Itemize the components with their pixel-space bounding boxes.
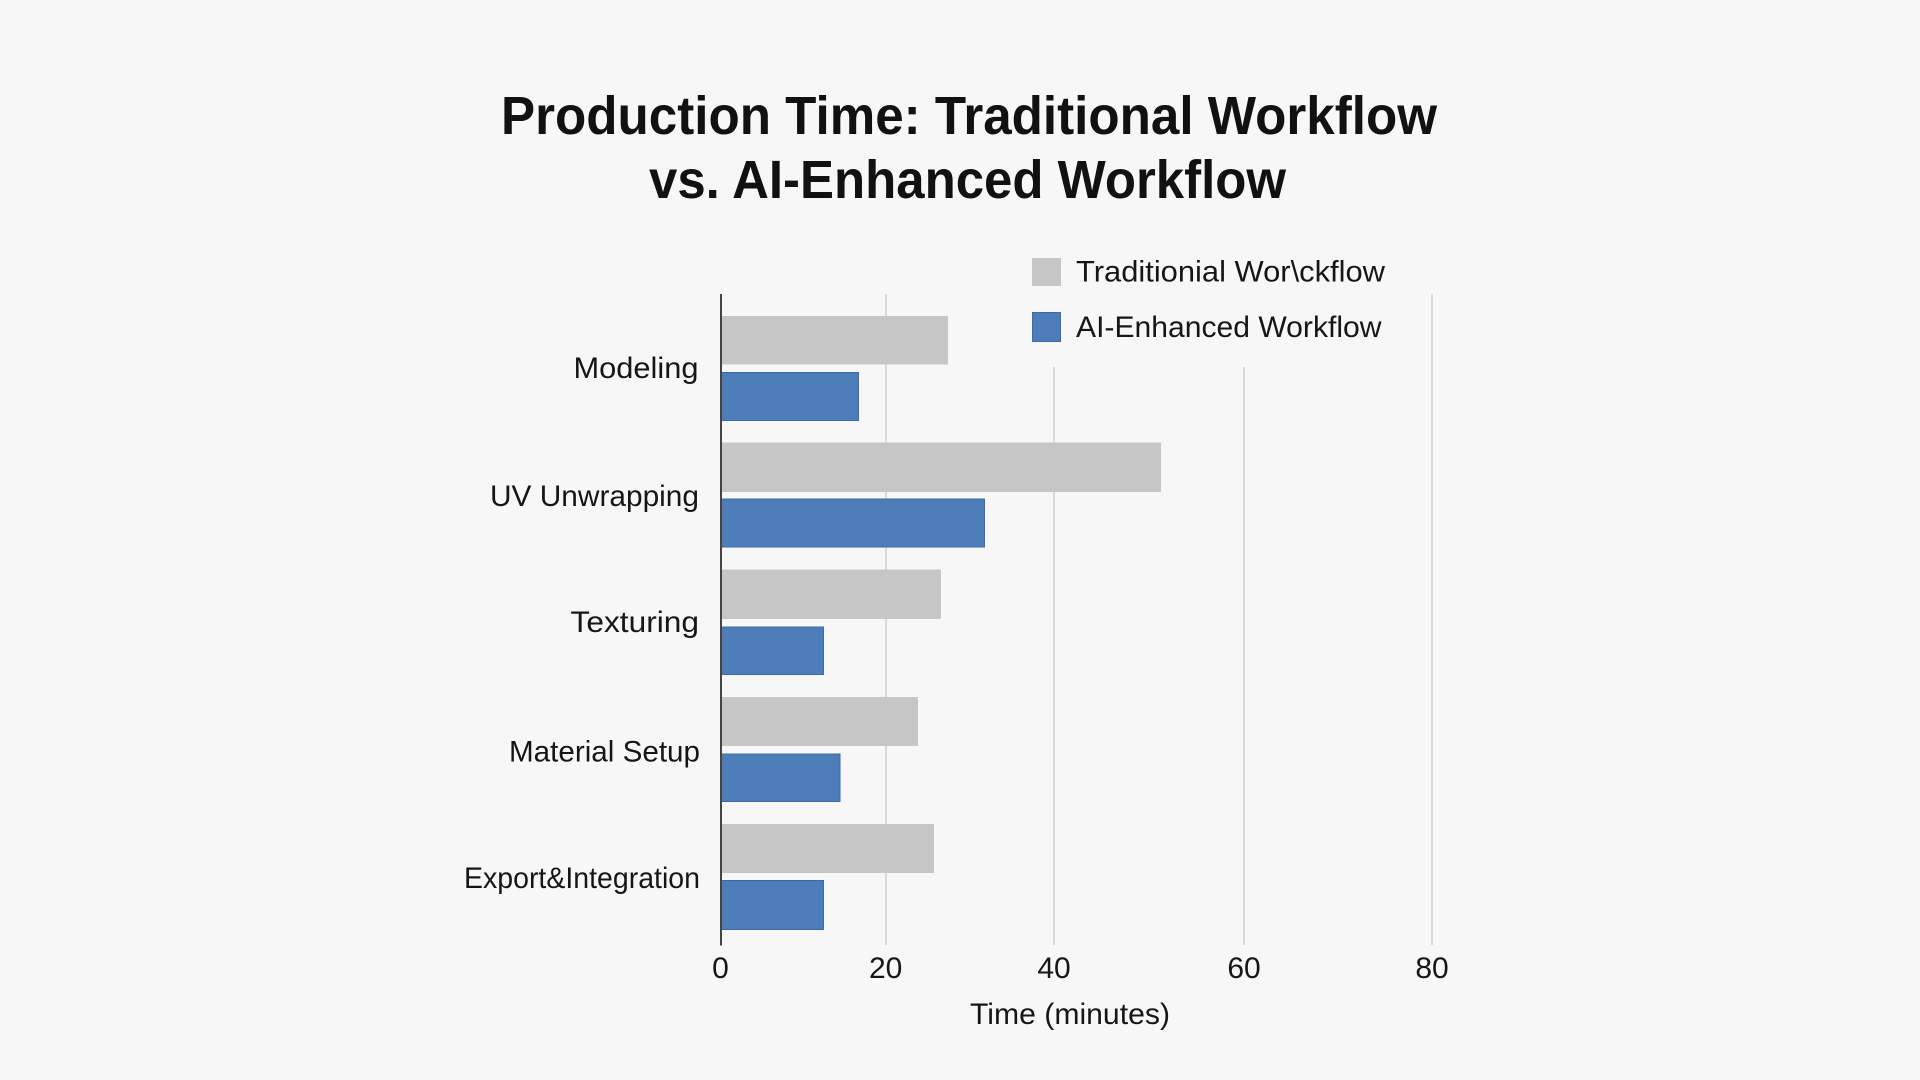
series: traditional workflow bars [721, 316, 1161, 873]
legend swatch: traditional [1032, 258, 1061, 286]
category labels [464, 352, 700, 895]
axis title: Time (minutes) [970, 998, 1170, 1031]
category labels: Modeling [574, 352, 698, 385]
legend label: traditional: Traditionial Wor\ckflow [1076, 256, 1385, 288]
legend [1032, 256, 1385, 344]
axis tick labels: 20 [869, 952, 902, 985]
title: vs. AI-Enhanced Workflow [649, 150, 1287, 210]
legend label: AI-enhanced: AI-Enhanced Workflow [1076, 311, 1382, 344]
axis tick labels: 60 [1227, 952, 1261, 985]
axis tick labels: 40 [1037, 952, 1071, 985]
vertical axis line [720, 294, 722, 946]
category labels: Material Setup [509, 736, 700, 768]
series: AI-enhanced workflow bars [721, 372, 984, 930]
axis tick labels [712, 952, 1449, 985]
axis tick labels: 0 [712, 952, 729, 985]
title [501, 86, 1438, 210]
legend swatch: AI-enhanced [1032, 312, 1060, 342]
axis tick labels: 80 [1415, 952, 1449, 985]
grid lines [886, 294, 1432, 945]
title: Production Time: Traditional Workflow [501, 86, 1438, 146]
category labels: Texturing [570, 606, 699, 639]
bar chart [464, 294, 1449, 1031]
category labels: UV Unwrapping [490, 480, 699, 513]
category labels: Export&Integration [464, 862, 700, 895]
